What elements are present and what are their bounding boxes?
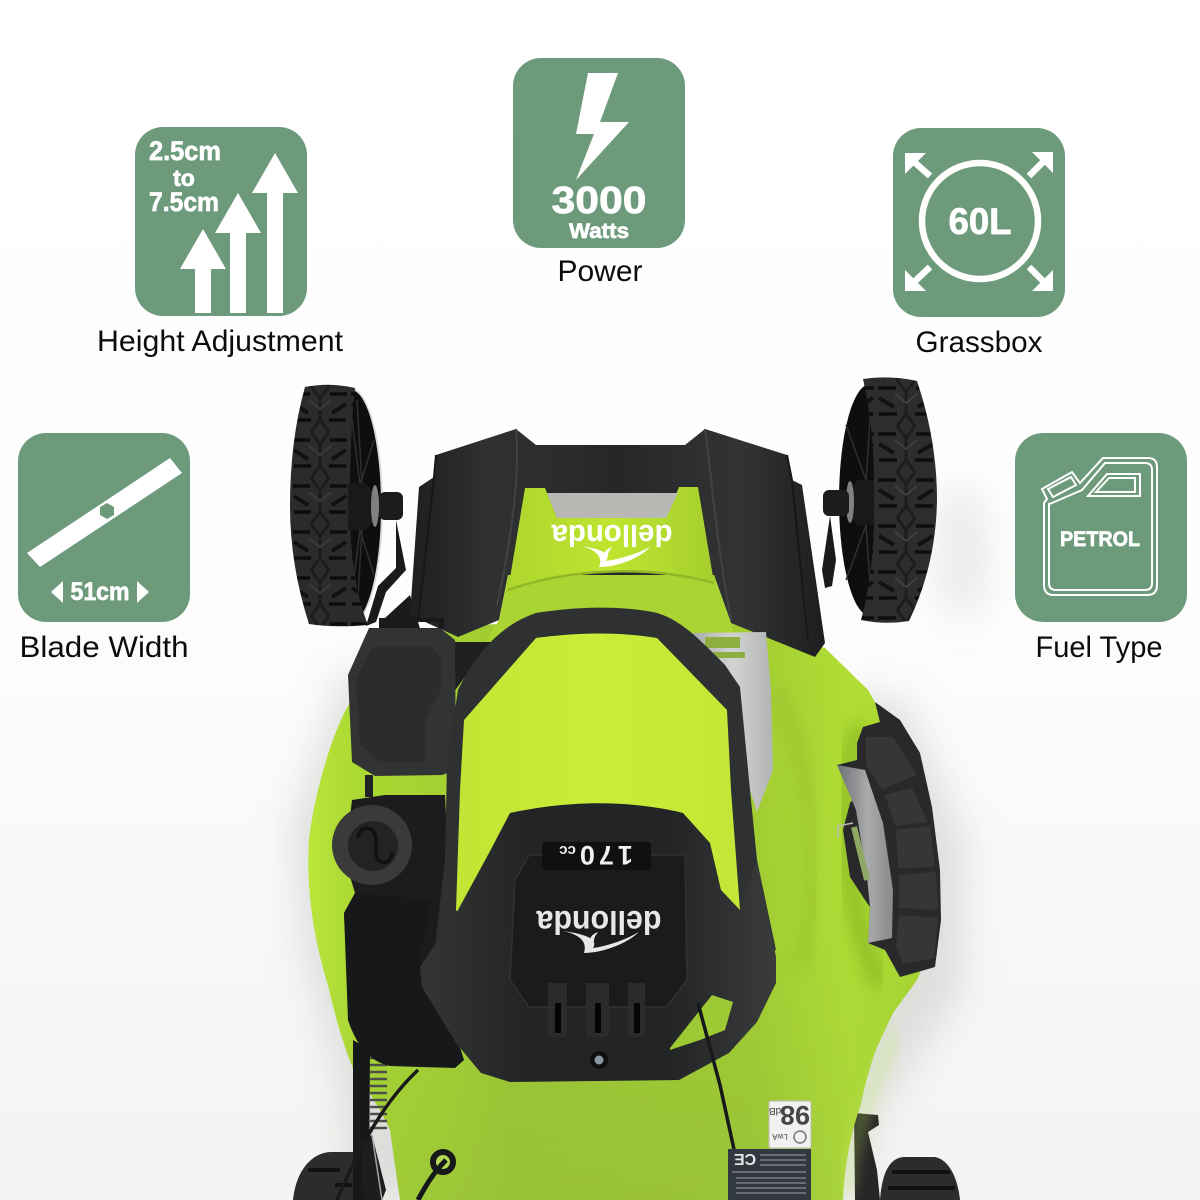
handle bar and spring — [353, 1040, 387, 1200]
icon: lightning bolt — [576, 73, 629, 180]
mower photograph — [290, 377, 990, 1200]
handle bar segment — [365, 775, 373, 797]
lower black control cover — [420, 803, 776, 1082]
noise rating label: LwA — [772, 1132, 788, 1141]
engine size badge: 170cc — [559, 840, 633, 870]
grass chute cover — [410, 429, 825, 657]
specification label — [728, 1149, 811, 1200]
specification label: CE — [734, 1150, 756, 1167]
silver bracket — [692, 632, 773, 812]
logo: dellonda upside down — [536, 910, 660, 953]
height range text: 7.5cm — [149, 187, 219, 217]
wall shadows — [292, 480, 990, 1200]
cut-out showing deck — [670, 995, 733, 1050]
fuel tank — [344, 893, 464, 1068]
control panel — [510, 840, 687, 1037]
clear flap window — [837, 765, 893, 943]
power value: 3000 — [552, 180, 646, 222]
icon: three rising arrows — [180, 153, 298, 313]
deck hole and cables — [337, 1070, 453, 1200]
cover screw — [590, 1051, 608, 1069]
logo: dellonda upside down — [551, 524, 672, 567]
height range text: 2.5cm — [149, 136, 221, 166]
chute window — [547, 493, 678, 518]
label: grassbox: Grassbox — [916, 326, 1042, 359]
icon: mower blade — [27, 458, 182, 567]
panel: height adjustment — [135, 127, 307, 316]
flap panels — [866, 737, 938, 964]
green logo plate — [508, 487, 714, 590]
panel: fuel type — [1015, 433, 1187, 622]
logo: dellonda upside down: dellonda — [536, 904, 662, 941]
starter cord — [696, 1002, 736, 1149]
engine shroud — [436, 608, 776, 950]
height range text — [149, 136, 221, 217]
icon: expanding circle — [905, 152, 1053, 291]
label: power: Power — [558, 255, 642, 288]
fuel cap — [332, 805, 412, 885]
lime engine cover — [456, 634, 740, 912]
blade width value: 51cm — [70, 578, 130, 606]
panel: grassbox — [893, 128, 1065, 317]
logo: dellonda upside down: dellonda — [551, 518, 672, 553]
rear bracket — [854, 1113, 880, 1200]
power unit: Watts — [569, 220, 629, 243]
dark engine body behind cap — [344, 795, 464, 1066]
center green neck — [486, 575, 731, 642]
engine size badge — [542, 840, 651, 870]
noise rating label — [769, 1100, 811, 1148]
panel: power — [513, 58, 685, 248]
capacity value: 60L — [948, 201, 1012, 242]
lower rear wheels — [293, 1152, 960, 1200]
right front wheel — [822, 377, 937, 623]
height range text: to — [173, 165, 195, 191]
green deck — [308, 620, 937, 1200]
vents — [548, 983, 645, 1037]
label: fuel type: Fuel Type — [1036, 631, 1162, 664]
label: blade width: Blade Width — [20, 631, 188, 664]
spring — [854, 827, 867, 880]
icon: jerry can — [1042, 458, 1157, 595]
fuel type text: PETROL — [1060, 528, 1140, 551]
label: height adjustment: Height Adjustment — [97, 325, 344, 358]
air filter box — [348, 618, 497, 776]
left front wheel — [290, 385, 421, 632]
noise rating label: dB — [769, 1105, 781, 1116]
noise rating label: 98 — [780, 1100, 810, 1130]
panel: blade width — [18, 433, 190, 622]
blade width value — [51, 578, 149, 606]
rear flap assembly — [837, 702, 941, 977]
